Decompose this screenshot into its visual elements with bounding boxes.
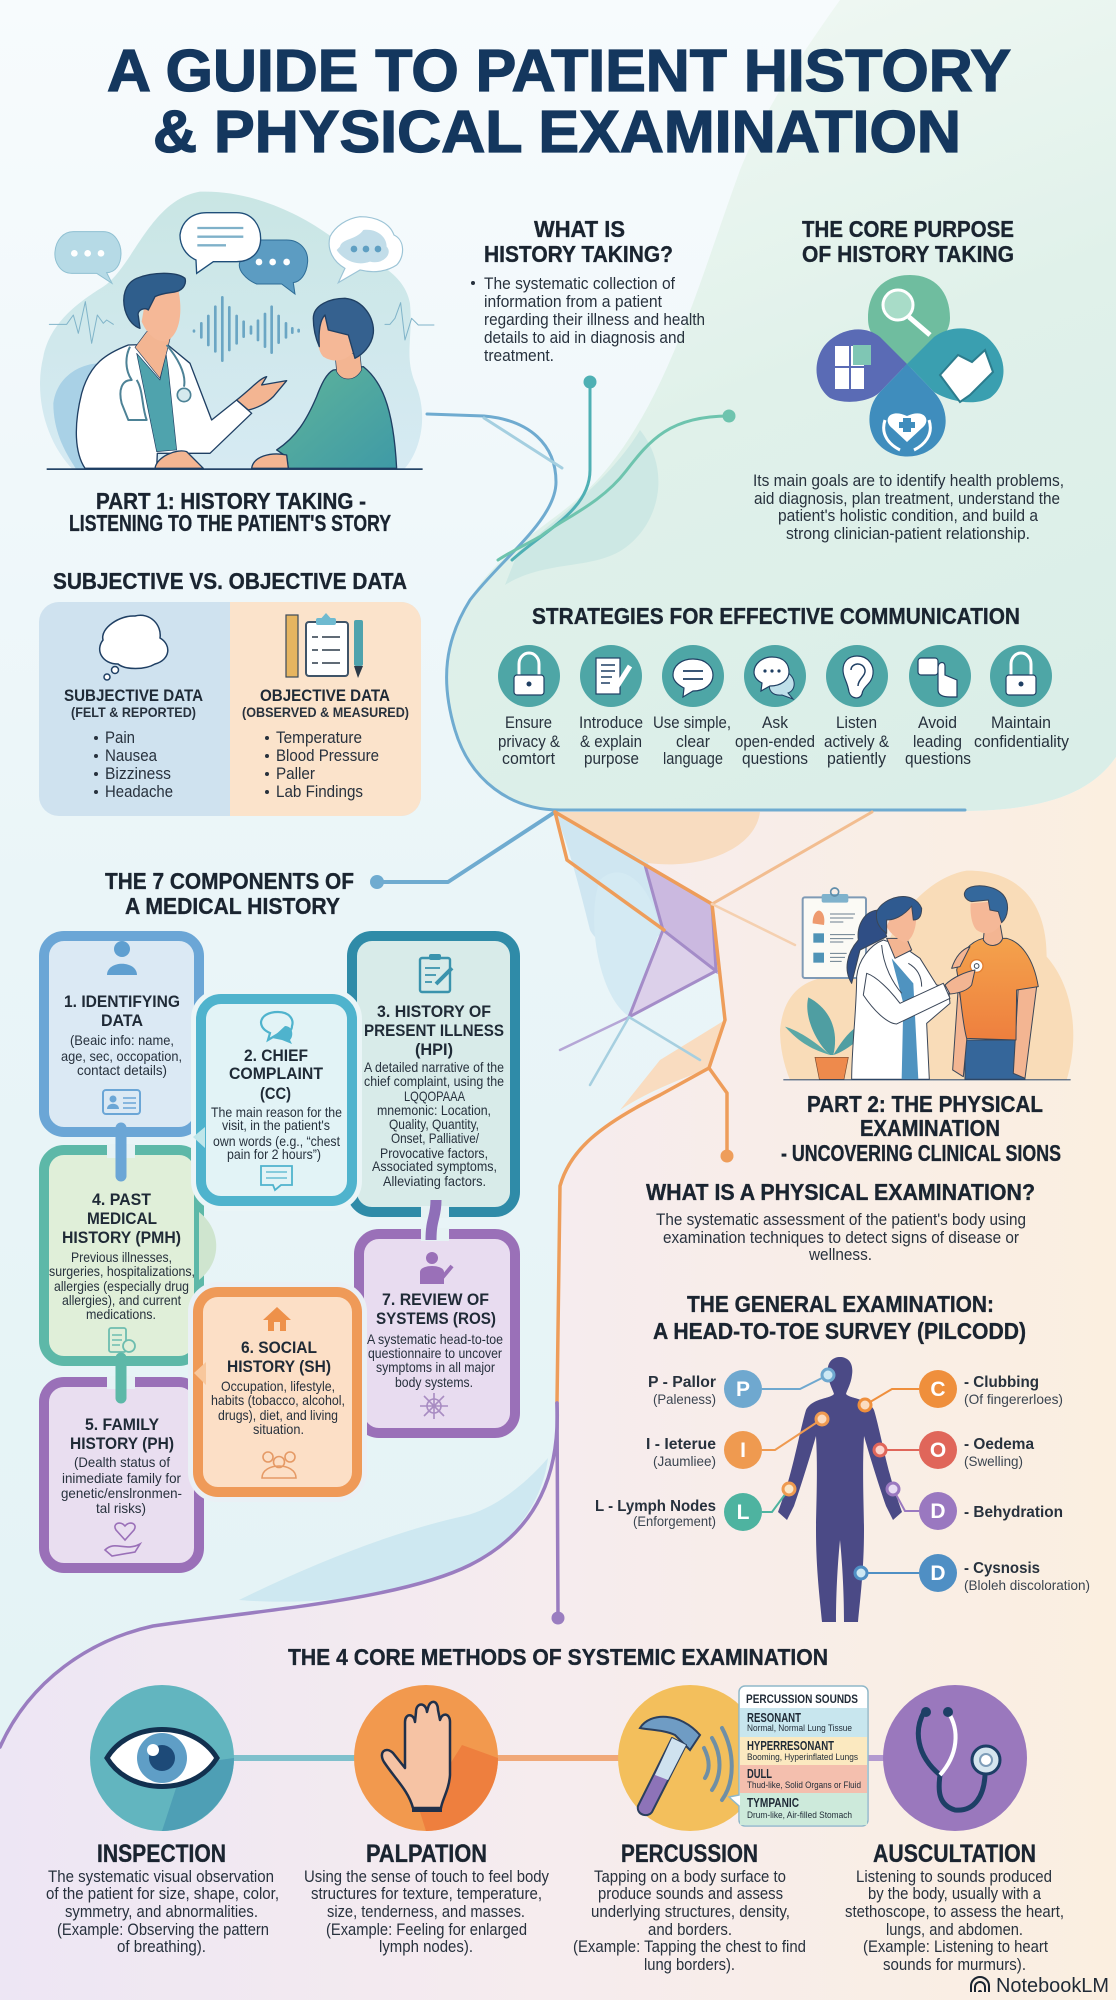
panel: subjective vs objective data (39, 602, 421, 816)
text: subjective data: Nausea (105, 746, 157, 765)
panel: communication strategy icons (498, 645, 1069, 768)
sound wave (49, 297, 434, 361)
table line (47, 468, 423, 470)
labels: strategies: leading (913, 732, 962, 751)
method: palpation: lymph nodes). (379, 1937, 473, 1956)
method: inspection: The systematic visual observation (48, 1867, 274, 1886)
card 2: chief complaint: 2. CHIEF (244, 1047, 308, 1065)
table: percussion sounds: TYMPANIC (747, 1796, 799, 1810)
card 5: family history: (Dealth status of (74, 1454, 170, 1470)
icon: ear (826, 645, 888, 707)
icon: puzzle of four goals (816, 275, 1004, 456)
icon: question bubbles (744, 645, 806, 707)
card 1: identifying data: contact details) (77, 1062, 167, 1078)
table: percussion sounds: Booming, Hyperinflated Lungs (747, 1752, 858, 1762)
card 4: past medical history: MEDICAL (87, 1210, 157, 1228)
card 1: identifying data: DATA (101, 1012, 143, 1030)
text: subjective data (64, 687, 203, 801)
text: subjective data: (FELT & REPORTED) (71, 705, 196, 720)
card 4: past medical history: 4. PAST (92, 1191, 151, 1209)
card 1: identifying data (44, 936, 199, 1132)
labels: strategies: Use simple, (653, 713, 731, 732)
method: inspection: of breathing). (117, 1937, 206, 1956)
marker: C clubbing (919, 1370, 1063, 1408)
text: core purpose (753, 471, 1064, 543)
card 5: family history: genetic/enslronmen- (61, 1485, 182, 1501)
labels: strategies: Introduce (579, 713, 643, 732)
icon: lock, privacy (498, 645, 560, 707)
labels: strategies: Maintain (991, 713, 1051, 732)
card 4: past medical history: allergies), and current (62, 1292, 181, 1308)
text: core purpose: Its main goals are to identify health problems, (753, 471, 1064, 490)
card 5: family history: 5. FAMILY (85, 1416, 159, 1434)
heading: core purpose: OF HISTORY TAKING (802, 241, 1014, 267)
labels: strategies: purpose (584, 749, 639, 768)
text: subjective data: Pain (105, 728, 135, 747)
icon: thought cloud (100, 615, 168, 680)
icon: stethoscope (883, 1685, 1027, 1831)
heading: part 2 (781, 1091, 1061, 1166)
heading: core purpose: THE CORE PURPOSE (802, 216, 1014, 242)
panel: 7 components flow (44, 936, 515, 1568)
card 3: history of present illness: LQQOPAAA (404, 1088, 466, 1104)
text: core purpose: aid diagnosis, plan treatment, understand the (754, 489, 1060, 508)
method: palpation: size, tenderness, and masses. (327, 1902, 525, 1921)
card 3: history of present illness: (HPI) (415, 1041, 453, 1059)
method: percussion: and borders. (648, 1920, 732, 1939)
method: auscultation: Listening to sounds produced (856, 1867, 1052, 1886)
heading: part 1: PART 1: HISTORY TAKING - (96, 488, 366, 514)
card 4: past medical history: medications. (86, 1306, 156, 1322)
marker: C clubbing: - Clubbing (964, 1374, 1039, 1391)
card 2: chief complaint: COMPLAINT (229, 1065, 323, 1083)
card 3: history of present illness: Quality, Quantity, (389, 1116, 479, 1132)
marker: I icterus: I - Ieterue (646, 1436, 716, 1453)
illustration: doctor talking with patient (40, 192, 434, 470)
heading: what is history taking (484, 216, 673, 267)
card 2: chief complaint: The main reason for the (211, 1104, 342, 1120)
card 7: review of systems: symptoms in all major (376, 1359, 495, 1375)
marker: O oedema: (Swelling) (964, 1453, 1023, 1469)
heading: part 1 (69, 488, 391, 536)
card 3: history of present illness: Provocative factors, (380, 1145, 488, 1161)
icon: human body figure (778, 1357, 902, 1622)
text: objective data (242, 687, 409, 801)
speech bubble: left (55, 232, 121, 283)
card 4: past medical history (44, 1144, 216, 1361)
method: auscultation: sounds for murmurs). (883, 1955, 1026, 1974)
method: palpation: (Example: Feeling for enlarged (326, 1920, 527, 1939)
heading: core purpose (802, 216, 1014, 267)
chart: PILCODD body map (595, 1357, 1090, 1622)
card 2: chief complaint: pain for 2 hours”) (227, 1146, 321, 1162)
method: percussion: Tapping on a body surface to (594, 1867, 786, 1886)
icon: clipboard, ruler, pen (286, 613, 363, 678)
logo: NotebookLM: NotebookLM (996, 1975, 1109, 1997)
patient (953, 886, 1038, 1079)
method: percussion (573, 1840, 806, 1974)
card 6: social history: situation. (253, 1421, 304, 1437)
card 3: history of present illness: 3. HISTORY OF (377, 1003, 491, 1021)
text: core purpose: strong clinician-patient relationship. (786, 524, 1030, 543)
card 3: history of present illness: PRESENT ILLNESS (364, 1022, 504, 1040)
title: & PHYSICAL EXAMINATION (153, 99, 961, 165)
text: what is history taking: information from a patient (484, 292, 662, 311)
illustration: doctor examining patient (780, 871, 1073, 1080)
card 4: past medical history: HISTORY (PMH) (62, 1229, 181, 1247)
method: auscultation: stethoscope, to assess the heart, (845, 1902, 1064, 1921)
card 5: family history: tal risks) (96, 1500, 146, 1516)
marker: O oedema (919, 1431, 1034, 1469)
heading: strategies: STRATEGIES FOR EFFECTIVE COMMUNICATION (532, 603, 1020, 629)
icon: hand (354, 1685, 498, 1831)
card 4: past medical history: surgeries, hospitalizations, (49, 1263, 195, 1279)
method: inspection: (Example: Observing the pattern (57, 1920, 269, 1939)
icon: lock, confidentiality (990, 645, 1052, 707)
labels: strategies: confidentiality (974, 732, 1069, 751)
card 6: social history: HISTORY (SH) (227, 1358, 331, 1376)
text: objective data: (OBSERVED & MEASURED) (242, 705, 409, 720)
card 3: history of present illness: mnemonic: Location, (377, 1102, 491, 1118)
text: what is history taking: details to aid in diagnosis and (484, 328, 685, 347)
table: percussion sounds: Thud-like, Solid Organs or Fluid (747, 1780, 861, 1790)
connector line between methods (162, 1755, 955, 1761)
card 3: history of present illness: Associated symptoms, (372, 1158, 497, 1174)
card 2: chief complaint (193, 999, 352, 1201)
heading: general examination (653, 1291, 1026, 1344)
text: physical examination definition (656, 1210, 1026, 1264)
connector: card 4 to card 5 (116, 1358, 126, 1398)
card 5: family history (44, 1376, 199, 1568)
card 3: history of present illness: Onset, Palliative/ (391, 1130, 479, 1146)
heading: 7 components (105, 868, 354, 919)
marker: L lymph nodes: L - Lymph Nodes (595, 1498, 716, 1515)
connector lines (0, 376, 965, 1747)
marker: D cyanosis (919, 1554, 1090, 1593)
card 7: review of systems (359, 1228, 515, 1433)
card 7: review of systems: 7. REVIEW OF (382, 1291, 489, 1309)
text: physical examination definition: examination techniques to detect signs of disease or (663, 1228, 1019, 1247)
heading: 4 core methods: THE 4 CORE METHODS OF SYSTEMIC EXAMINATION (288, 1644, 828, 1670)
card 7: review of systems: body systems. (395, 1374, 473, 1390)
text: core purpose: patient's holistic condition, and build a (778, 506, 1038, 525)
labels: strategies: language (663, 749, 723, 768)
heading: part 1: LISTENING TO THE PATIENT'S STORY (69, 510, 391, 536)
heading: subjective vs objective: SUBJECTIVE VS. OBJECTIVE DATA (53, 568, 407, 594)
method: auscultation: lungs, and abdomen. (886, 1920, 1023, 1939)
marker: D cyanosis: - Cysnosis (964, 1560, 1040, 1577)
method: auscultation: (Example: Listening to heart (863, 1937, 1048, 1956)
connector: card 3 to card 7 (431, 1200, 436, 1240)
card 3: history of present illness: A detailed narrative of the (364, 1059, 504, 1075)
card 6: social history: drugs), diet, and living (218, 1407, 338, 1423)
heading: general examination: A HEAD-TO-TOE SURVEY (PILCODD) (653, 1318, 1026, 1344)
labels: strategies: actively & (824, 732, 890, 751)
panel: 4 core methods (46, 1685, 1064, 1974)
text: physical examination definition: The systematic assessment of the patient's body using (656, 1210, 1026, 1229)
card 1: identifying data: age, sec, occopation, (61, 1048, 182, 1064)
table: percussion sounds: Normal, Normal Lung Tissue (747, 1723, 852, 1733)
heading: what is history taking: WHAT IS (534, 216, 625, 242)
marker: P pallor: P (736, 1378, 750, 1401)
method: percussion: PERCUSSION (621, 1840, 758, 1868)
method: auscultation: AUSCULTATION (873, 1840, 1036, 1868)
method: palpation: Using the sense of touch to feel body (304, 1867, 549, 1886)
title (107, 38, 1011, 165)
card 1: identifying data: 1. IDENTIFYING (64, 993, 180, 1011)
card 5: family history: HISTORY (PH) (70, 1435, 174, 1453)
card 4: past medical history: allergies (especially drug (54, 1278, 189, 1294)
labels: strategies: Ensure (505, 713, 552, 732)
speech bubble: blue (239, 240, 308, 294)
marker: P pallor: P - Pallor (648, 1374, 716, 1391)
marker: P pallor (648, 1370, 762, 1408)
marker: D dehydration: - Behydration (964, 1504, 1063, 1521)
heading: general examination: THE GENERAL EXAMINATION: (687, 1291, 994, 1317)
method: inspection: INSPECTION (97, 1840, 226, 1868)
heading: what is history taking: HISTORY TAKING? (484, 241, 673, 267)
marker: I icterus: (Jaumliee) (653, 1453, 716, 1469)
method: auscultation: by the body, usually with a (868, 1884, 1041, 1903)
labels: strategies: comtort (502, 749, 555, 768)
marker: D dehydration (919, 1492, 1063, 1530)
card 6: social history (194, 1292, 357, 1492)
method: palpation (304, 1840, 549, 1956)
icon: percussion hammer (618, 1685, 762, 1831)
marker: C clubbing: C (930, 1378, 946, 1401)
method: percussion: lung borders). (644, 1955, 735, 1974)
labels: strategies: & explain (580, 732, 642, 751)
clipboard (803, 888, 866, 978)
labels: strategies: privacy & (498, 732, 561, 751)
labels: strategies: questions (905, 749, 971, 768)
card 3: history of present illness (352, 936, 515, 1218)
card 2: chief complaint: own words (e.g., “chest (213, 1133, 340, 1149)
labels: strategies: open-ended (735, 732, 815, 751)
method: inspection: of the patient for size, shape, color, (46, 1884, 279, 1903)
table: percussion sounds: DULL (747, 1767, 772, 1781)
card 6: social history: 6. SOCIAL (241, 1339, 317, 1357)
method: percussion: produce sounds and assess (598, 1884, 783, 1903)
speech bubble: white (180, 213, 261, 273)
connector: card 1 to card 4 (116, 1128, 126, 1176)
text: physical examination definition: wellness. (808, 1245, 872, 1264)
method: auscultation (845, 1840, 1064, 1974)
text: objective data: Lab Findings (276, 782, 363, 801)
icon: pointing hand (909, 645, 971, 707)
table: percussion sounds: Drum-like, Air-filled Stomach (747, 1810, 852, 1820)
marker: L lymph nodes: L (737, 1501, 750, 1524)
labels: strategies: clear (676, 732, 710, 751)
text: subjective data: Bizziness (105, 764, 171, 783)
card 6: social history: Occupation, lifestyle, (221, 1378, 335, 1394)
icon: speech bubble (662, 645, 724, 707)
text: objective data: Blood Pressure (276, 746, 379, 765)
card 2: chief complaint: visit, in the patient's (222, 1117, 330, 1133)
icon: notepad and pen (580, 645, 642, 707)
method: inspection: symmetry, and abnormalities. (65, 1902, 258, 1921)
card 6: social history: habits (tobacco, alcohol, (211, 1392, 345, 1408)
card 3: history of present illness: chief complaint, using the (364, 1073, 504, 1089)
title: A GUIDE TO PATIENT HISTORY (107, 38, 1011, 104)
patient (252, 298, 397, 468)
plant (785, 997, 858, 1079)
card 7: review of systems: SYSTEMS (ROS) (376, 1310, 496, 1328)
labels: strategies: patiently (827, 749, 886, 768)
heading: part 2: PART 2: THE PHYSICAL (807, 1091, 1043, 1117)
card 5: family history: inimediate family for (62, 1470, 181, 1486)
table: percussion sounds: HYPERRESONANT (747, 1739, 834, 1753)
labels: strategies: questions (742, 749, 808, 768)
heading: 7 components: A MEDICAL HISTORY (125, 893, 340, 919)
text: what is history taking: treatment. (484, 346, 554, 365)
card 2: chief complaint: (CC) (260, 1085, 291, 1103)
marker: I icterus (646, 1431, 762, 1469)
table: percussion sounds: PERCUSSION SOUNDS (746, 1692, 858, 1706)
card 7: review of systems: A systematic head-to-toe (367, 1331, 503, 1347)
method: inspection (46, 1840, 279, 1956)
doctor (76, 273, 287, 468)
card 1: identifying data: (Beaic info: name, (70, 1032, 174, 1048)
text: what is history taking: regarding their illness and health (484, 310, 705, 329)
marker: O oedema: O (930, 1439, 946, 1462)
marker: D cyanosis: (Bloleh discoloration) (964, 1577, 1090, 1593)
marker: O oedema: - Oedema (964, 1436, 1034, 1453)
marker: D cyanosis: D (930, 1562, 946, 1585)
labels: strategies: Ask (762, 713, 788, 732)
labels: strategies (498, 713, 1069, 768)
text: what is history taking: The systematic collection of (484, 274, 675, 293)
labels: strategies: Avoid (918, 713, 957, 732)
text: what is history taking (471, 274, 705, 365)
heading: part 2: EXAMINATION (860, 1115, 1000, 1141)
marker: L lymph nodes: (Enforgement) (633, 1513, 716, 1529)
method: percussion: underlying structures, density, (591, 1902, 790, 1921)
text: objective data: Paller (276, 764, 315, 783)
marker: L lymph nodes (595, 1493, 762, 1531)
icon: eye (90, 1685, 234, 1831)
marker: P pallor: (Paleness) (653, 1391, 716, 1407)
marker: I icterus: I (740, 1439, 746, 1462)
card 7: review of systems: questionnaire to uncover (368, 1345, 502, 1361)
thought bubble (329, 217, 403, 283)
heading: what is a physical examination: WHAT IS A PHYSICAL EXAMINATION? (646, 1179, 1035, 1205)
doctor (847, 897, 975, 1079)
text: subjective data: Headache (105, 782, 173, 801)
marker: D dehydration: D (930, 1500, 946, 1523)
table: percussion sounds: RESONANT (747, 1711, 801, 1725)
table: percussion sounds (729, 1686, 868, 1826)
marker: C clubbing: (Of fingererloes) (964, 1391, 1063, 1407)
method: palpation: PALPATION (366, 1840, 487, 1868)
labels: strategies: Listen (836, 713, 877, 732)
method: percussion: (Example: Tapping the chest to find (573, 1937, 806, 1956)
lines to nodes (762, 1375, 919, 1573)
method: palpation: structures for texture, temperature, (311, 1884, 542, 1903)
text: subjective data: SUBJECTIVE DATA (64, 687, 203, 705)
heading: 7 components: THE 7 COMPONENTS OF (105, 868, 354, 894)
text: objective data: Temperature (276, 728, 362, 747)
card 4: past medical history: Previous illnesses, (71, 1249, 172, 1265)
text: objective data: OBJECTIVE DATA (260, 687, 390, 705)
card 3: history of present illness: Alleviating factors. (383, 1173, 486, 1189)
